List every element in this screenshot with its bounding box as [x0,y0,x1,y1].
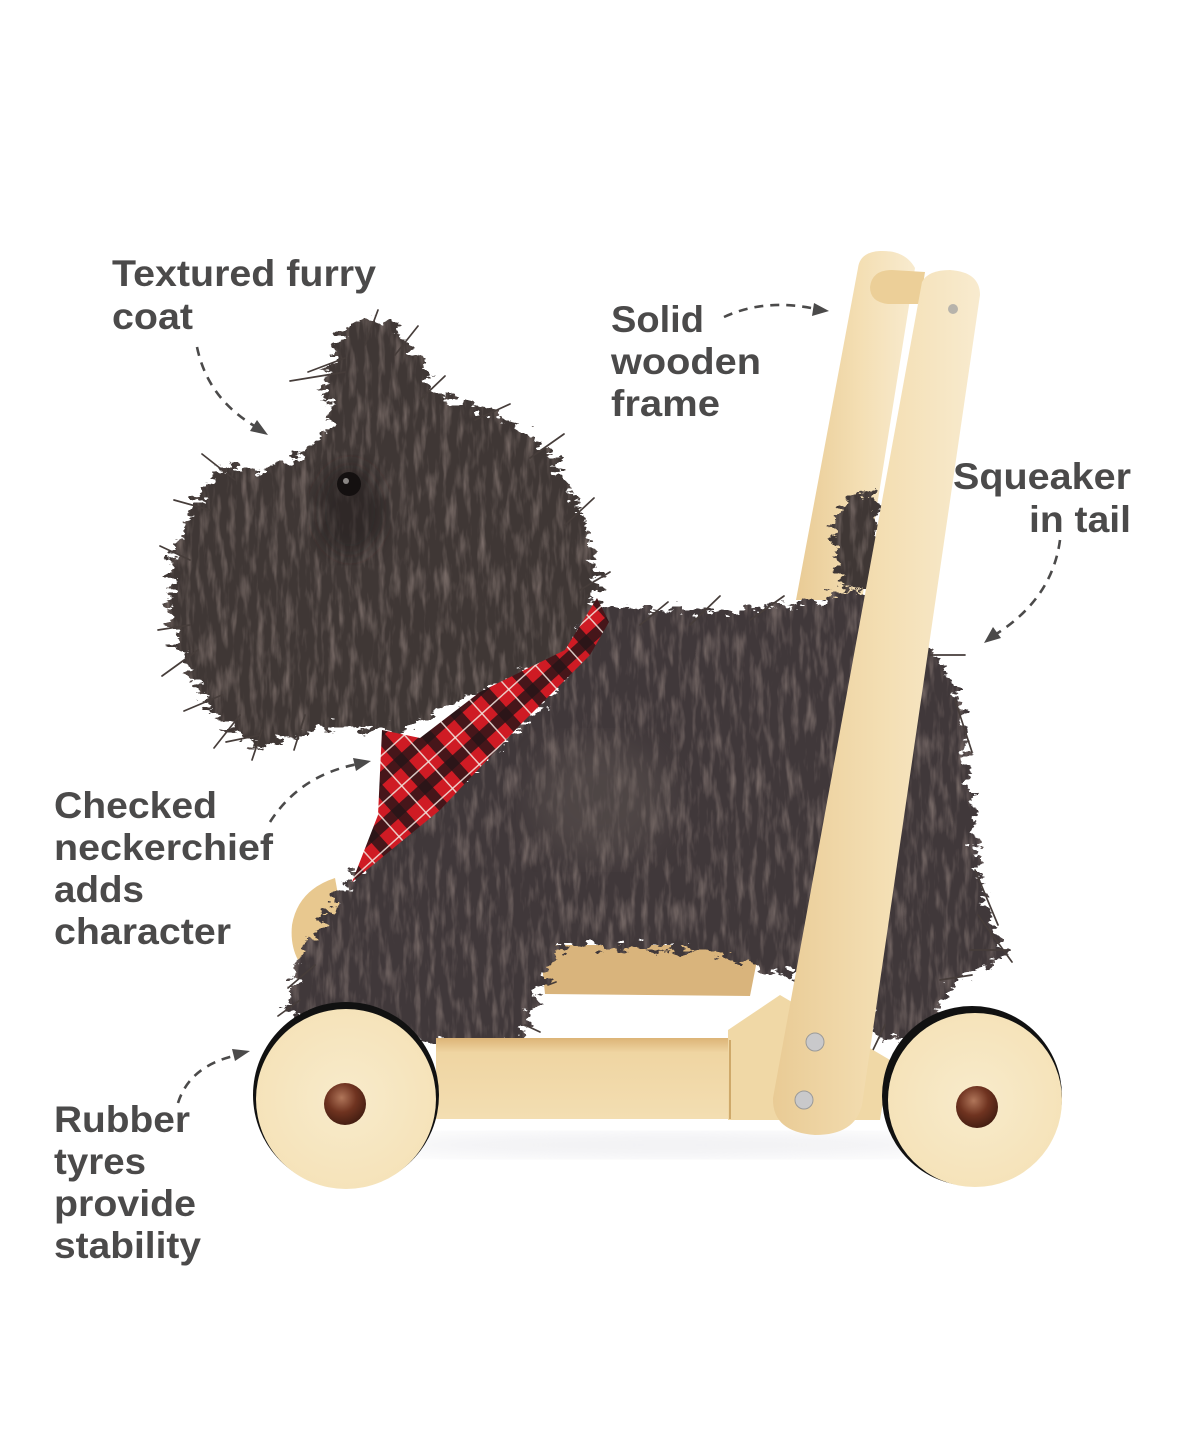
label: squeaker in tail: Squeaker [953,456,1131,497]
label: rubber tyres provide stability [54,1099,201,1266]
floor shadow [380,1133,960,1157]
label: squeaker in tail [953,456,1131,540]
label: solid wooden frame [610,299,761,424]
label: rubber tyres provide stability: stability [54,1225,201,1266]
label: checked neckerchief adds character: neckerchief [54,827,274,868]
label: checked neckerchief adds character: adds [54,869,144,910]
label: rubber tyres provide stability: tyres [54,1141,146,1182]
icon: dog eye [337,472,361,496]
rear wooden upright of frame [796,251,925,600]
arrow: solid wooden frame [724,303,829,317]
front wooden upright of frame [773,270,980,1135]
arrow: squeaker in tail [984,540,1060,643]
arrow: checked neckerchief [270,758,371,822]
arrow: textured furry coat [197,347,268,435]
wooden seat board under dog [540,945,760,996]
arrow: rubber tyres [178,1049,250,1103]
label: checked neckerchief adds character: character [54,911,231,952]
label: rubber tyres provide stability: Rubber [54,1099,190,1140]
label: squeaker in tail: in tail [1029,499,1131,540]
label: solid wooden frame: wooden [610,341,761,382]
wheel axle frame bar [436,995,890,1120]
label: textured furry coat: coat [112,296,193,337]
label: checked neckerchief adds character [54,785,274,952]
checked neckerchief [352,598,609,882]
label: solid wooden frame: Solid [611,299,704,340]
label: rubber tyres provide stability: provide [54,1183,196,1224]
right wheel [882,1006,1062,1187]
label: textured furry coat [112,253,376,337]
fur strands on head edge [158,310,610,760]
label: textured furry coat: Textured furry [112,253,376,294]
plush dog head [158,310,610,760]
body shading [530,740,670,860]
shading around the eye and neck [316,464,384,556]
plush dog body [278,590,1012,1054]
icon: dog tail [833,490,880,590]
fur strands on body edge [278,596,1012,1054]
label: checked neckerchief adds character: Checked [54,785,217,826]
left wheel [253,1002,439,1189]
label: solid wooden frame: frame [611,383,720,424]
wooden front peg behind chest [292,878,350,960]
